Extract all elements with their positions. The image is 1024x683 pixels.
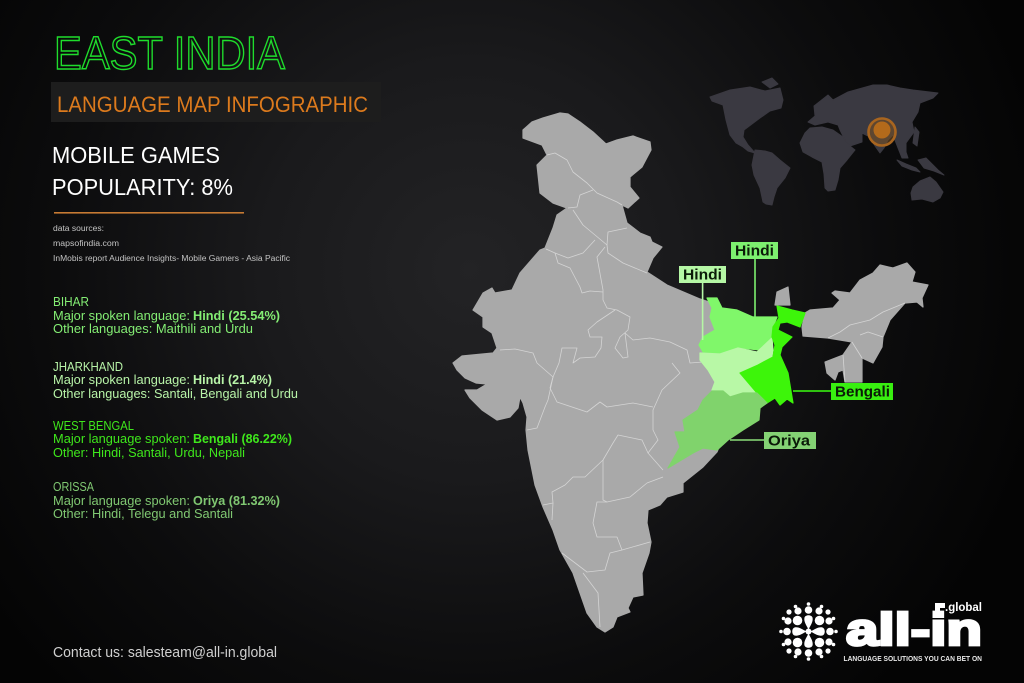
text block: Jharkhand — [53, 359, 298, 401]
world map locator — [710, 78, 944, 205]
label: Hindi (Bihar): Hindi — [735, 242, 774, 260]
label: Bengali: Bengali — [835, 384, 890, 400]
text block: Bihar: BIHAR — [53, 294, 89, 309]
state: Orissa — [668, 391, 767, 468]
text block: Jharkhand: JHARKHAND — [53, 359, 123, 374]
text block: West Bengal: Other: Hindi, Santali, Urdu, Nepali — [53, 445, 245, 460]
state: Jharkhand — [700, 338, 773, 397]
subtitle band: LANGUAGE MAP INFOGRAPHIC — [57, 92, 368, 117]
text block: Jharkhand: Hindi (21.4%) — [193, 372, 272, 387]
data sources: data sources: — [53, 224, 104, 233]
text block: Orissa: Major language spoken: — [53, 493, 190, 508]
logo — [779, 600, 982, 663]
text block: West Bengal: Major language spoken: — [53, 431, 190, 446]
text block: Orissa: Other: Hindi, Telegu and Santali — [53, 506, 233, 521]
mobile games popularity heading: POPULARITY: 8% — [52, 174, 233, 200]
data sources — [53, 224, 290, 263]
icon: location marker — [868, 118, 896, 146]
base country shape — [453, 113, 730, 632]
text block: Orissa — [53, 479, 280, 521]
India map — [453, 113, 928, 632]
mobile games popularity heading — [52, 142, 233, 200]
text block: Orissa: Oriya (81.32%) — [193, 493, 280, 508]
data sources: mapsofindia.com — [53, 239, 119, 248]
text block: Bihar — [53, 294, 280, 336]
.global: .global — [945, 600, 982, 614]
label: Hindi (Bihar) — [731, 242, 778, 317]
mobile games popularity heading: MOBILE GAMES — [52, 142, 220, 168]
wordmark: all-in — [846, 604, 982, 655]
label: Hindi (Jharkhand): Hindi — [683, 266, 722, 284]
text block: Bihar: Major spoken language: — [53, 308, 190, 323]
title: EAST INDIA — [54, 27, 285, 79]
text block: Bihar: Hindi (25.54%) — [193, 308, 280, 323]
label: Bengali — [793, 383, 893, 400]
label: Hindi (Jharkhand) — [679, 266, 726, 340]
text block: Bihar: Other languages: Maithili and Urdu — [53, 321, 253, 336]
text block: West Bengal: Bengali (86.22%) — [193, 431, 292, 446]
tagline: LANGUAGE SOLUTIONS YOU CAN BET ON — [844, 656, 982, 663]
state: West Bengal — [740, 306, 805, 405]
subtitle band — [51, 82, 381, 122]
state: Bihar — [699, 298, 777, 353]
text block: Jharkhand: Other languages: Santali, Bengali and Urdu — [53, 386, 298, 401]
data sources: InMobis report Audience Insights- Mobile Gamers - Asia Pacific — [53, 254, 290, 263]
state borders — [500, 153, 905, 627]
text block: Jharkhand: Major spoken language: — [53, 372, 190, 387]
icon: small square — [935, 603, 945, 612]
north-east states — [802, 263, 928, 382]
text block: Orissa: ORISSA — [53, 479, 94, 494]
contact line: Contact us: salesteam@all-in.global — [53, 644, 277, 661]
icon: globe — [779, 602, 838, 661]
label: Oriya — [730, 432, 816, 450]
text block: West Bengal — [53, 418, 292, 460]
text block: West Bengal: WEST BENGAL — [53, 418, 134, 433]
label: Oriya: Oriya — [768, 432, 811, 450]
